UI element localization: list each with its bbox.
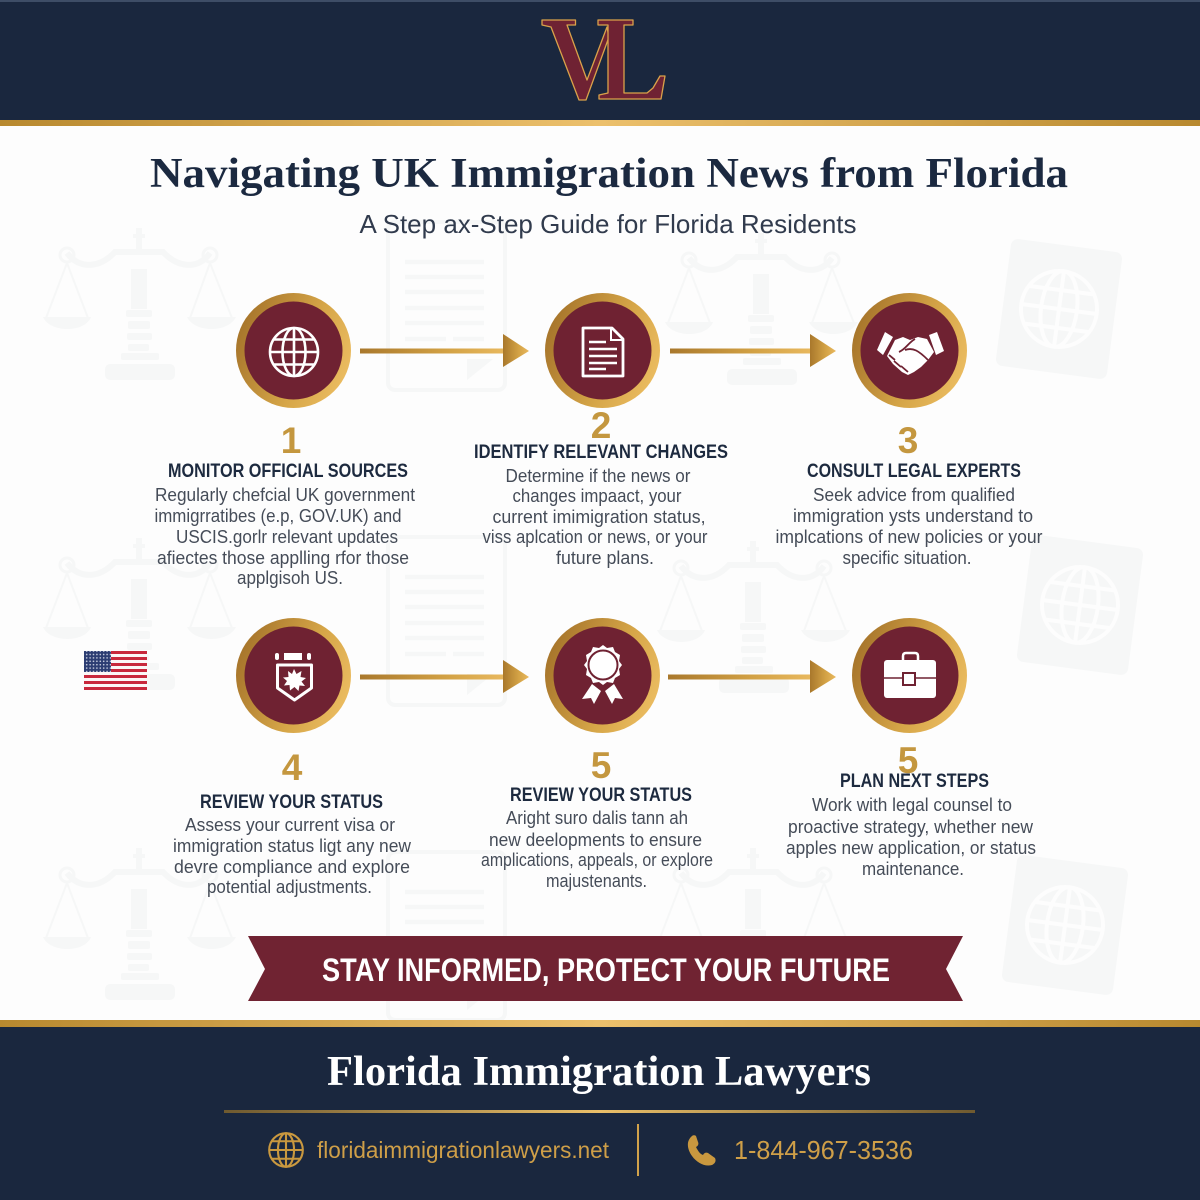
- step 2 text: viss aplcation or news, or your: [482, 527, 708, 547]
- step 5 icon: rosette: [545, 618, 660, 733]
- arrow 5 to 6: [668, 660, 836, 693]
- step 4 text: potential adjustments.: [207, 877, 372, 897]
- step 3 text: CONSULT LEGAL EXPERTS: [807, 461, 1021, 482]
- step 2 text: Determine if the news or: [506, 466, 690, 486]
- step 6 text: apples new application, or status: [786, 838, 1036, 858]
- step 6 text: Work with legal counsel to: [812, 795, 1012, 815]
- arrow 1 to 2: [360, 334, 529, 367]
- subtitle: A Step ax-Step Guide for Florida Residents: [360, 209, 856, 239]
- step 6 text: PLAN NEXT STEPS: [840, 771, 989, 792]
- icon: footer globe: [269, 1133, 303, 1167]
- step 6 text: proactive strategy, whether new: [788, 817, 1034, 837]
- step 4 text: [173, 747, 412, 897]
- header band: [0, 0, 1200, 126]
- step 1 text: afiectes those applling rfor those: [157, 548, 409, 568]
- step 3 text: Seek advice from qualified: [813, 485, 1015, 505]
- footer rule: [224, 1110, 975, 1113]
- step 6 icon: briefcase: [852, 618, 967, 733]
- watermark background: scales, documents, passports: [43, 222, 1144, 1020]
- step 6 text: maintenance.: [862, 859, 964, 879]
- step 2 text: 2: [591, 405, 611, 446]
- step 2 text: current imimigration status,: [492, 507, 706, 527]
- step 2 text: future plans.: [556, 548, 654, 568]
- footer band: [0, 1020, 1200, 1200]
- icon: phone: [688, 1135, 716, 1166]
- step 1 text: immigrratibes (e.p, GOV.UK) and: [154, 506, 402, 526]
- step 4 text: Assess your current visa or: [185, 815, 395, 835]
- step 2 icon: document: [545, 293, 660, 408]
- phone number: 1-844-967-3536: [734, 1135, 913, 1165]
- step 5 text: majustenants.: [546, 871, 647, 891]
- step 5 text: 5: [591, 745, 611, 786]
- step 3 text: implcations of new policies or your: [776, 527, 1043, 547]
- call-to-action ribbon: [248, 936, 963, 1001]
- step 2 text: changes impaact, your: [512, 486, 682, 506]
- step 4 text: devre compliance and explore: [174, 857, 410, 877]
- step 4 text: immigration status ligt any new: [173, 836, 412, 856]
- logo: VL monogram: [542, 20, 665, 100]
- step 6 text: [786, 740, 1036, 879]
- step 1 text: MONITOR OFFICIAL SOURCES: [168, 461, 408, 482]
- step 5 text: [481, 745, 713, 891]
- step 1 text: 1: [281, 420, 301, 461]
- footer divider: [637, 1124, 639, 1176]
- step 1 text: Regularly chefcial UK government: [155, 485, 415, 505]
- icon: US flag: [84, 651, 147, 690]
- step 3 icon: handshake: [852, 293, 967, 408]
- step 5 text: Aright suro dalis tann ah: [506, 808, 688, 828]
- step 4 text: 4: [282, 747, 303, 788]
- step 1 text: USCIS.gorlr relevant updates: [176, 527, 398, 547]
- footer firm name: Florida Immigration Lawyers: [327, 1049, 871, 1095]
- step 4 text: REVIEW YOUR STATUS: [200, 792, 383, 813]
- website: floridaimmigrationlawyers.net: [317, 1137, 610, 1163]
- step 3 text: immigration ysts understand to: [793, 506, 1033, 526]
- step 2 text: IDENTIFY RELEVANT CHANGES: [474, 442, 728, 463]
- step 1 text: applgisoh US.: [237, 568, 343, 588]
- step 1 icon: globe: [236, 293, 351, 408]
- step 5 text: amplications, appeals, or explore: [481, 850, 713, 870]
- step 3 text: [776, 420, 1043, 568]
- arrow 2 to 3: [670, 334, 836, 367]
- step 3 text: 3: [898, 420, 918, 461]
- call-to-action ribbon: STAY INFORMED, PROTECT YOUR FUTURE: [322, 952, 890, 988]
- step 2 text: [474, 405, 728, 568]
- arrow 4 to 5: [360, 660, 529, 693]
- step 5 text: REVIEW YOUR STATUS: [510, 785, 692, 806]
- step 3 text: specific situation.: [842, 548, 972, 568]
- step 1 text: [154, 420, 415, 588]
- step 6 text: 5: [898, 740, 918, 781]
- title: Navigating UK Immigration News from Florida: [150, 151, 1068, 197]
- step 5 text: new deelopments to ensure: [489, 830, 702, 850]
- step 4 icon: shield: [236, 618, 351, 733]
